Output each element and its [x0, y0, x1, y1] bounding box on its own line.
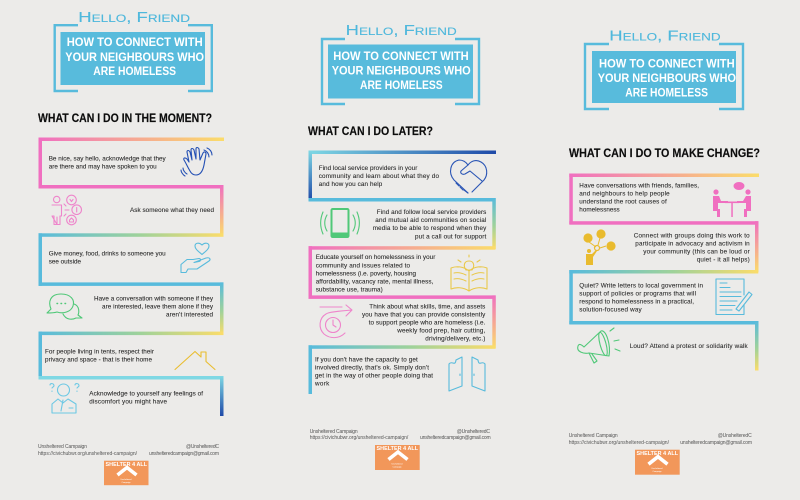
step: conversations: homelessness — [579, 207, 620, 214]
title banner: YOUR NEIGHBOURS WHO — [598, 71, 736, 85]
step: educate: homelessness (i.e. poverty, housing — [316, 270, 416, 277]
greeting: Hello, Friend — [346, 22, 457, 39]
title banner: HOW TO CONNECT WITH — [333, 49, 469, 63]
step: find providers: community and learn about what they do — [319, 173, 439, 180]
icon: network person — [583, 229, 616, 265]
title banner: HOW TO CONNECT WITH — [67, 35, 203, 49]
panel: in the moment — [38, 9, 224, 485]
icon: phone with signal — [321, 209, 359, 237]
footer credits: unshelteredcampaign@gmail.com — [420, 435, 491, 441]
title banner — [585, 44, 743, 109]
step: skills: you have that you can provide consistently — [362, 311, 486, 318]
winding gradient path — [569, 174, 759, 370]
step: groups: participate in advocacy and activism in — [635, 240, 750, 247]
step: quiet: respond to homelessness in a practical, — [579, 298, 694, 305]
step: educate: Educate yourself on homelessness in your — [316, 254, 435, 261]
step: be nice: Be nice, say hello, acknowledge that they — [49, 156, 167, 162]
title banner: YOUR NEIGHBOURS WHO — [332, 63, 471, 77]
step: find providers: and how you can help — [319, 181, 383, 188]
step: skills: Think about what skills, time, and assets — [369, 303, 485, 310]
logo: shelter 4 all: SHELTER 4 ALL — [636, 451, 679, 457]
step: quiet: Quiet? Write letters to local government in — [579, 282, 703, 289]
logo: shelter 4 all — [635, 450, 680, 475]
footer credits: unshelteredcampaign@gmail.com — [680, 440, 752, 446]
icon: two people at a table — [713, 182, 751, 217]
icon: document and pen — [716, 279, 752, 314]
icon: open doors — [449, 357, 485, 391]
footer credits — [310, 429, 491, 441]
greeting: Hello, Friend — [78, 9, 190, 26]
step: educate: affordability, vacancy rate, mental illness, — [316, 278, 434, 285]
footer credits: @UnshelteredC — [457, 429, 490, 435]
step: follow: Find and follow local service providers — [377, 209, 486, 216]
footer credits: Unsheltered Campaign — [38, 444, 87, 450]
section heading: WHAT CAN I DO LATER? — [308, 125, 433, 138]
footer credits: https://civichubwr.org/unsheltered-campaign/ — [38, 451, 138, 457]
icon: megaphone — [578, 328, 620, 363]
section heading: WHAT CAN I DO TO MAKE CHANGE? — [569, 147, 760, 160]
step: capacity: get in the way of other people doing that — [315, 373, 433, 380]
logo: shelter 4 all — [104, 461, 148, 485]
title banner: HOW TO CONNECT WITH — [599, 56, 735, 70]
footer credits: unshelteredcampaign@gmail.com — [149, 451, 219, 457]
title banner — [55, 25, 212, 91]
logo: shelter 4 all: Campaign — [392, 466, 402, 468]
icon: chat bubbles — [47, 294, 82, 319]
step: tents: For people living in tents, respect their — [45, 348, 154, 356]
step: educate: substance use, trauma) — [316, 286, 383, 293]
logo: shelter 4 all — [375, 445, 420, 470]
title banner: ARE HOMELESS — [360, 78, 443, 92]
step: give: Give money, food, drinks to someone you — [49, 250, 166, 258]
step: skills: driving/delivery, etc.) — [425, 336, 485, 343]
step: capacity: work — [314, 381, 330, 388]
section heading: WHAT CAN I DO IN THE MOMENT? — [38, 112, 212, 125]
panel: later — [308, 22, 496, 470]
step: conversations: understand the root causes of — [579, 199, 667, 206]
step: give: see outside — [49, 258, 81, 266]
logo: shelter 4 all: SHELTER 4 ALL — [106, 462, 148, 468]
step: conversation: aren't interested — [166, 312, 213, 319]
step: follow: put a call out for support — [415, 234, 487, 241]
footer credits — [38, 444, 219, 457]
title banner: ARE HOMELESS — [93, 64, 176, 78]
step: conversations: Have conversations with friends, families, — [579, 182, 699, 189]
icon: person with needs — [52, 195, 81, 225]
step: groups: Connect with groups doing this work to — [634, 232, 750, 239]
step: ask: Ask someone what they need — [130, 207, 214, 214]
title banner: YOUR NEIGHBOURS WHO — [65, 50, 204, 64]
logo: shelter 4 all: Unsheltered — [392, 462, 403, 466]
step: follow: and mutual aid communities on social — [375, 217, 486, 224]
step: educate: community and issues related to — [316, 262, 410, 269]
logo: shelter 4 all: SHELTER 4 ALL — [376, 446, 419, 452]
icon: hand with heart — [181, 243, 210, 272]
step: groups: your community (this can be loud or — [643, 249, 750, 256]
logo: shelter 4 all: Unsheltered — [652, 467, 663, 470]
step: follow: media to be able to respond when they — [373, 225, 487, 232]
step: conversation: Have a conversation with someone if they — [94, 296, 214, 303]
step: be nice: are there and may have spoken to you — [49, 164, 157, 170]
title banner — [322, 39, 479, 104]
icon: house roof — [175, 352, 215, 370]
logo: shelter 4 all: Campaign — [122, 482, 131, 484]
footer credits: @UnshelteredC — [186, 444, 219, 450]
step: quiet: solution-focused way — [579, 306, 643, 313]
winding gradient path — [38, 138, 224, 416]
step: tents: privacy and space - that is their home — [45, 356, 152, 364]
step: quiet: support of policies or programs that will — [579, 290, 696, 297]
logo: shelter 4 all: Unsheltered — [120, 478, 132, 481]
step: discomfort: discomfort you might have — [89, 399, 167, 406]
icon: open book with bulb — [451, 255, 487, 291]
footer credits: Unsheltered Campaign — [569, 433, 618, 439]
step: capacity: If you don't have the capacity to get — [315, 357, 418, 364]
step: conversations: and neighbours to help people — [579, 191, 670, 198]
step: groups: quiet - it all helps) — [697, 257, 750, 264]
step: discomfort: Acknowledge to yourself any feelings of — [89, 391, 203, 398]
panel: make change — [569, 28, 760, 475]
title banner: ARE HOMELESS — [625, 86, 708, 100]
greeting: Hello, Friend — [609, 28, 721, 45]
icon: heart handshake — [451, 160, 487, 193]
logo: shelter 4 all: Campaign — [652, 471, 662, 473]
step: skills: weekly food prep, hair cutting, — [396, 328, 486, 335]
winding gradient path — [308, 150, 496, 394]
footer credits — [569, 433, 752, 446]
footer credits: https://civichubwr.org/unsheltered-campaign/ — [569, 440, 670, 446]
step: conversation: are interested, leave them alone if they — [102, 304, 214, 311]
footer credits: @UnshelteredC — [718, 433, 752, 439]
step: skills: to support people who are homeless (i.e. — [369, 320, 486, 327]
icon: worried person — [50, 384, 79, 413]
footer credits: Unsheltered Campaign — [310, 429, 358, 435]
step: find providers: Find local service providers in your — [319, 165, 417, 172]
icon: clock with arrow — [320, 305, 352, 338]
icon: waving hand — [181, 148, 212, 176]
step: loud: Loud? Attend a protest or solidarity walk — [630, 343, 749, 350]
footer credits: https://civichubwr.org/unsheltered-campaign/ — [310, 435, 409, 441]
step: capacity: involved directly, that's ok. Simply don't — [315, 365, 429, 372]
